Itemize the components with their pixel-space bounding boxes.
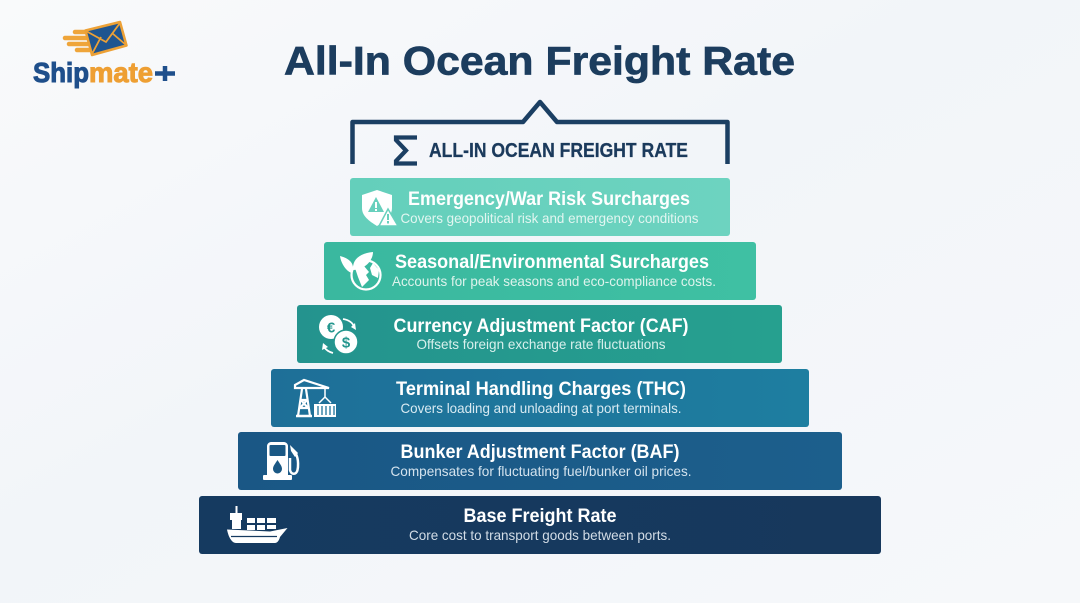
heading: Seasonal/Environmental Surcharges — [395, 252, 709, 273]
title: All-In Ocean Freight Rate — [284, 40, 795, 84]
logo wordmark: mate — [89, 57, 153, 88]
heading: Terminal Handling Charges (THC) — [396, 379, 686, 400]
heading: Emergency/War Risk Surcharges — [408, 189, 690, 210]
logo wordmark — [33, 57, 175, 88]
icon: fuel pump — [263, 442, 298, 480]
panel: currency adjustment factor — [297, 305, 782, 363]
heading: Bunker Adjustment Factor (BAF) — [400, 442, 680, 463]
icon: currency exchange — [319, 315, 358, 354]
logo wordmark: Ship — [33, 57, 89, 88]
heading: Base Freight Rate — [464, 506, 616, 527]
summit bracket — [352, 102, 728, 164]
icon: flying envelope — [65, 22, 126, 55]
description: Offsets foreign exchange rate fluctuations — [416, 336, 666, 352]
description: Compensates for fluctuating fuel/bunker oil prices. — [390, 463, 692, 479]
panel: terminal handling charges — [271, 369, 809, 427]
heading: Currency Adjustment Factor (CAF) — [394, 316, 688, 337]
panel: seasonal/environmental surcharges — [324, 242, 756, 300]
icon: currency exchange: $ — [342, 334, 351, 352]
logo: Shipmate+ — [33, 22, 175, 88]
icon: sigma — [396, 138, 417, 164]
description: Covers geopolitical risk and emergency conditions — [400, 210, 698, 226]
description: Core cost to transport goods between ports. — [409, 527, 671, 543]
panel: emergency/war risk surcharges — [350, 178, 730, 236]
summit label: ALL-IN OCEAN FREIGHT RATE — [429, 140, 688, 162]
icon: port crane with container — [295, 380, 336, 417]
icon: container ship — [227, 506, 288, 543]
description: Accounts for peak seasons and eco-compliance costs. — [392, 273, 716, 289]
panel: bunker adjustment factor — [238, 432, 842, 490]
icon: shield with warning triangles — [362, 190, 398, 226]
panel: base freight rate — [199, 496, 881, 554]
icon: currency exchange: € — [327, 320, 336, 336]
description: Covers loading and unloading at port terminals. — [400, 400, 682, 416]
icon: leaves and globe — [340, 252, 380, 290]
